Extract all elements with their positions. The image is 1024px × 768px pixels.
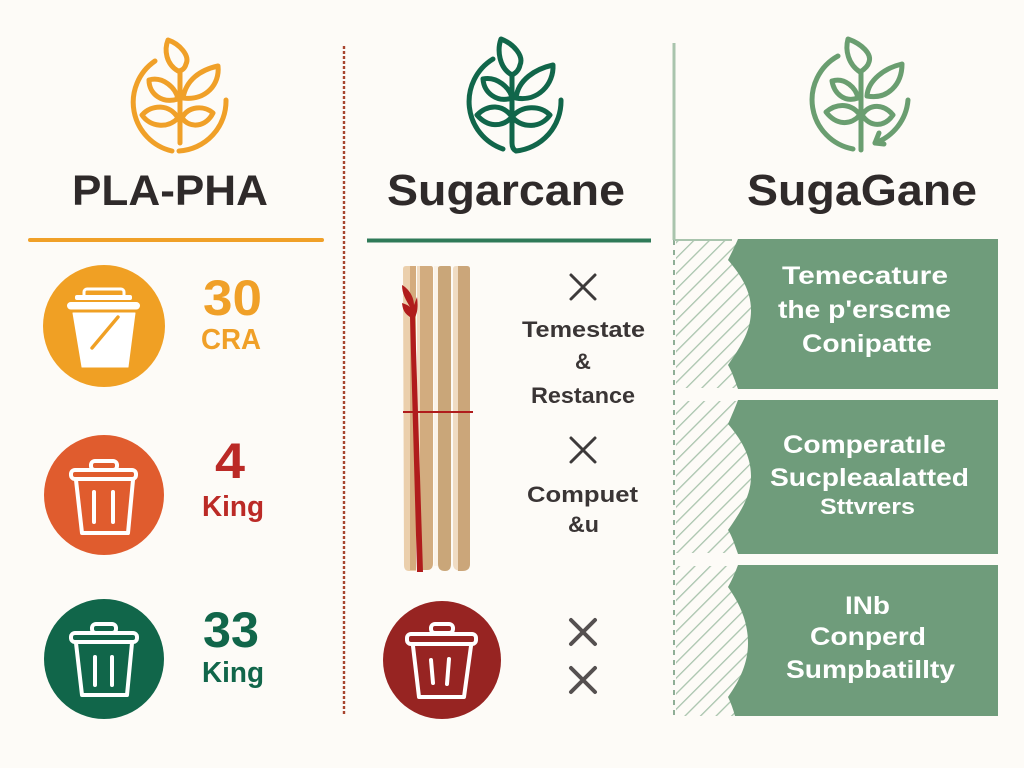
heading rule: green (367, 238, 651, 242)
heading rule: orange (28, 238, 324, 242)
icon: dark red bin (383, 601, 501, 719)
icon: cross (571, 275, 595, 299)
icon: orange plant in circle (133, 40, 226, 151)
icon: pair of crosses (571, 620, 595, 692)
stat: 4 King: King (202, 491, 264, 523)
hatched strip: row 1 (676, 241, 752, 388)
card: INb: INb (845, 592, 890, 620)
stat: 4 King: 4 (215, 433, 245, 489)
card: Temecature: Temecature (782, 262, 948, 290)
card: Comperatile: Sttvrers (820, 494, 915, 519)
icon: sage green plant with recycling arrow (812, 39, 908, 150)
heading: PLA-PHA: PLA-PHA (72, 167, 268, 215)
card: Temecature: the p'erscme (778, 296, 951, 324)
icon: dark green plant in circle (469, 39, 561, 151)
stat: 30 CRA: CRA (201, 324, 261, 356)
stat: 30 CRA: 30 (203, 270, 262, 326)
stat: 4 King (202, 433, 264, 523)
icon: green bin (44, 599, 164, 719)
heading: Sugarcane: Sugarcane (387, 166, 625, 215)
hatched strip: row 3 (676, 566, 748, 716)
text: Temestate & Restance: & (575, 349, 591, 374)
card: INb: Sumpbatillty (786, 656, 955, 684)
icon: orange bin (43, 265, 165, 387)
stat: 30 CRA (201, 270, 262, 356)
illustration: bundle of sugarcane stalks (402, 266, 473, 572)
hatched strip: row 2 (676, 401, 752, 553)
card: INb: Conperd (810, 623, 926, 651)
card: Comperatile: Sucpleaalatted (770, 464, 969, 492)
text: Compuet &u: &u (568, 512, 599, 537)
card: Comperatile: Comperatıle (783, 431, 946, 459)
stat: 33 King: King (202, 657, 264, 689)
text: Temestate & Restance: Restance (531, 383, 635, 408)
card: INb (728, 565, 998, 716)
panel: SugaGane column (676, 39, 998, 716)
text: Compuet &u: Compuet (527, 482, 639, 507)
card: Temecature (728, 239, 998, 389)
heading: SugaGane: SugaGane (747, 166, 977, 215)
panel: PLA-PHA column (28, 40, 324, 719)
text: Compuet &u (527, 482, 639, 537)
stat: 33 King (202, 602, 264, 689)
stat: 33 King: 33 (203, 602, 259, 658)
text: Temestate & Restance (522, 317, 645, 408)
text: Temestate & Restance: Temestate (522, 317, 645, 342)
card: Comperatile (728, 400, 998, 554)
card: Temecature: Conipatte (802, 330, 932, 358)
icon: red-orange bin (44, 435, 164, 555)
panel: Sugarcane column (367, 39, 651, 719)
icon: cross (571, 438, 595, 462)
